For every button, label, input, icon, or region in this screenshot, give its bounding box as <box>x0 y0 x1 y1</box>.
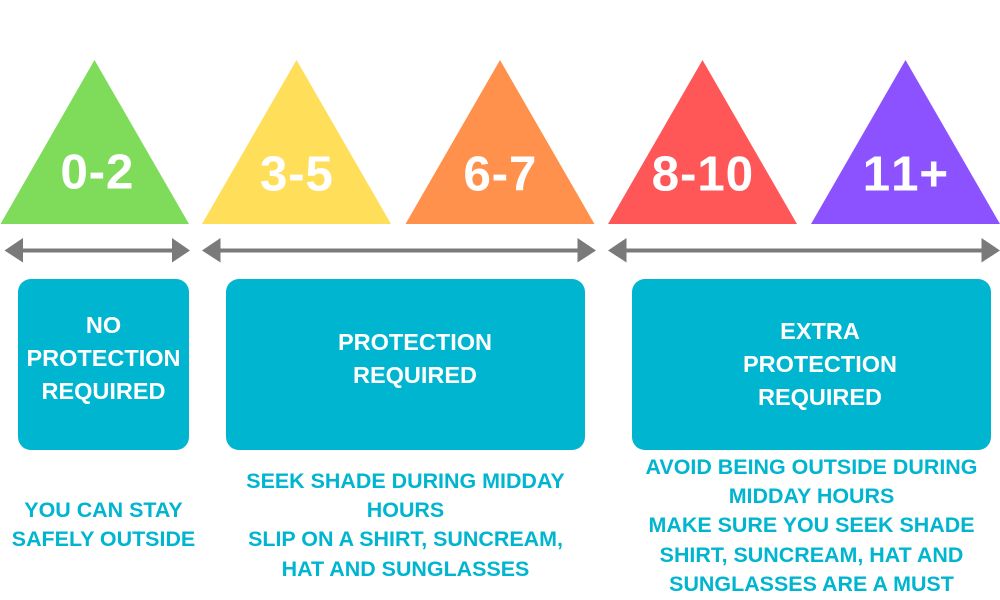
triangle: 8-10: 8-10 <box>652 146 754 202</box>
box: extra protection required <box>632 279 991 450</box>
triangle: 3-5 <box>202 60 391 224</box>
triangle: 0-2 <box>0 60 189 224</box>
advice: very high and extreme risk: MIDDAY HOURS <box>729 484 894 508</box>
triangle: 3-5: 3-5 <box>260 146 334 202</box>
advice: moderate and high risk: HAT AND SUNGLASSES <box>282 557 529 581</box>
arrow: range 0-2 <box>4 238 190 262</box>
triangle: 0-2: 0-2 <box>60 144 134 200</box>
box: no protection required: PROTECTION <box>26 345 181 371</box>
advice: moderate and high risk: HOURS <box>367 498 444 522</box>
advice: moderate and high risk: SLIP ON A SHIRT, SUNCREAM, <box>248 527 563 551</box>
advice: very high and extreme risk: SUNGLASSES ARE A MUST <box>669 572 954 596</box>
box: extra protection required: REQUIRED <box>758 384 882 410</box>
advice: moderate and high risk <box>246 469 565 581</box>
triangle: 11+ <box>811 60 1000 224</box>
triangle: 6-7: 6-7 <box>463 146 537 202</box>
box: no protection required <box>18 279 189 450</box>
advice: low risk <box>12 498 195 551</box>
triangle: 8-10 <box>608 60 797 224</box>
box: extra protection required: EXTRA <box>780 318 860 344</box>
triangle: 6-7 <box>406 60 594 224</box>
box: protection required: PROTECTION <box>338 329 492 355</box>
box: extra protection required: PROTECTION <box>743 351 897 377</box>
advice: very high and extreme risk <box>646 455 977 596</box>
advice: moderate and high risk: SEEK SHADE DURING MIDDAY <box>246 469 565 493</box>
advice: low risk: SAFELY OUTSIDE <box>12 527 195 551</box>
box: no protection required: REQUIRED <box>41 378 166 404</box>
triangle: 11+: 11+ <box>863 146 949 202</box>
advice: low risk: YOU CAN STAY <box>24 498 183 522</box>
advice: very high and extreme risk: AVOID BEING OUTSIDE DURING <box>646 455 977 479</box>
arrow: range 3-7 <box>202 238 596 262</box>
arrow: range 8-11+ <box>608 238 1000 262</box>
advice: very high and extreme risk: MAKE SURE YOU SEEK SHADE <box>648 513 974 537</box>
box: protection required: REQUIRED <box>353 362 477 388</box>
box: protection required <box>226 279 585 450</box>
advice: very high and extreme risk: SHIRT, SUNCREAM, HAT AND <box>660 543 963 567</box>
box: no protection required: NO <box>86 312 121 338</box>
